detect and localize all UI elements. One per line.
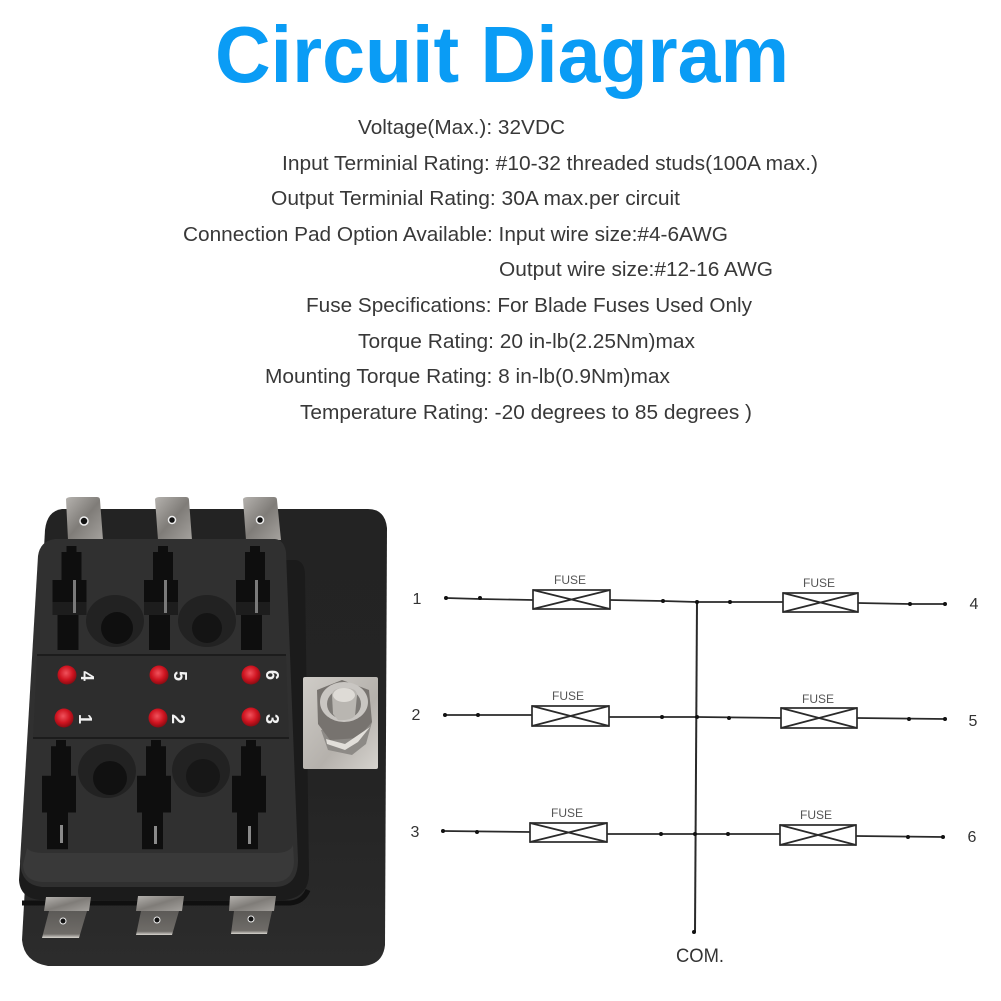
cover lower bevel [23,845,294,882]
terminal numbers: 4 [970,596,979,613]
title: Circuit Diagram [215,10,789,99]
bottom output terminals [42,896,276,938]
lower fuse slots [42,740,266,849]
input stud terminal [303,677,378,769]
circuit row 1 [446,590,945,612]
specifications text block: Fuse Specifications: For Blade Fuses Used Only [306,295,752,317]
fuse block product photo [19,497,387,966]
circuit row 2 [445,706,945,728]
bottom groove [22,890,308,903]
LED numbers: 4 [77,671,97,681]
mounting holes [78,595,236,798]
cover skirt [19,560,309,900]
LED numbers: 6 [262,670,282,680]
top output terminals [66,497,281,540]
circuit diagram [411,573,979,967]
FUSE labels: FUSE [554,573,586,587]
terminal numbers: 2 [412,707,421,724]
indicator LEDs [54,666,260,728]
specifications text block: Voltage(Max.): 32VDC [358,117,565,139]
terminal numbers: 6 [968,829,977,846]
terminal numbers: 3 [411,824,420,841]
specifications text block: Connection Pad Option Available: Input wire size:#4-6AWG [183,224,728,246]
terminal numbers: 1 [413,591,422,608]
LED numbers: 2 [168,714,188,724]
specifications text block: Mounting Torque Rating: 8 in-lb(0.9Nm)max [265,366,670,388]
FUSE labels: FUSE [803,576,835,590]
specifications text block [183,117,818,424]
terminal numbers [411,591,979,846]
COM label: COM. [676,946,724,967]
specifications text block: Temperature Rating: -20 degrees to 85 degrees ) [300,402,752,424]
LED numbers: 1 [75,714,95,724]
junction dots [441,596,947,934]
specifications text block: Output Terminial Rating: 30A max.per circuit [271,188,680,210]
LED numbers: 5 [170,671,190,681]
FUSE labels: FUSE [552,689,584,703]
LED numbers: 3 [262,714,282,724]
upper fuse slots [52,546,270,650]
specifications text block: Torque Rating: 20 in-lb(2.25Nm)max [358,331,695,353]
LED strip [33,655,289,738]
specifications text block: Output wire size:#12-16 AWG [499,259,773,281]
FUSE labels: FUSE [800,808,832,822]
common bus [695,602,697,932]
FUSE labels [551,573,835,822]
terminal numbers: 5 [969,713,978,730]
FUSE labels: FUSE [551,806,583,820]
circuit row 3 [443,823,943,845]
LED numbers [75,670,282,724]
base plate [22,509,387,966]
specifications text block: Input Terminial Rating: #10-32 threaded studs(100A max.) [282,153,818,175]
fuse cover [20,539,298,887]
FUSE labels: FUSE [802,692,834,706]
